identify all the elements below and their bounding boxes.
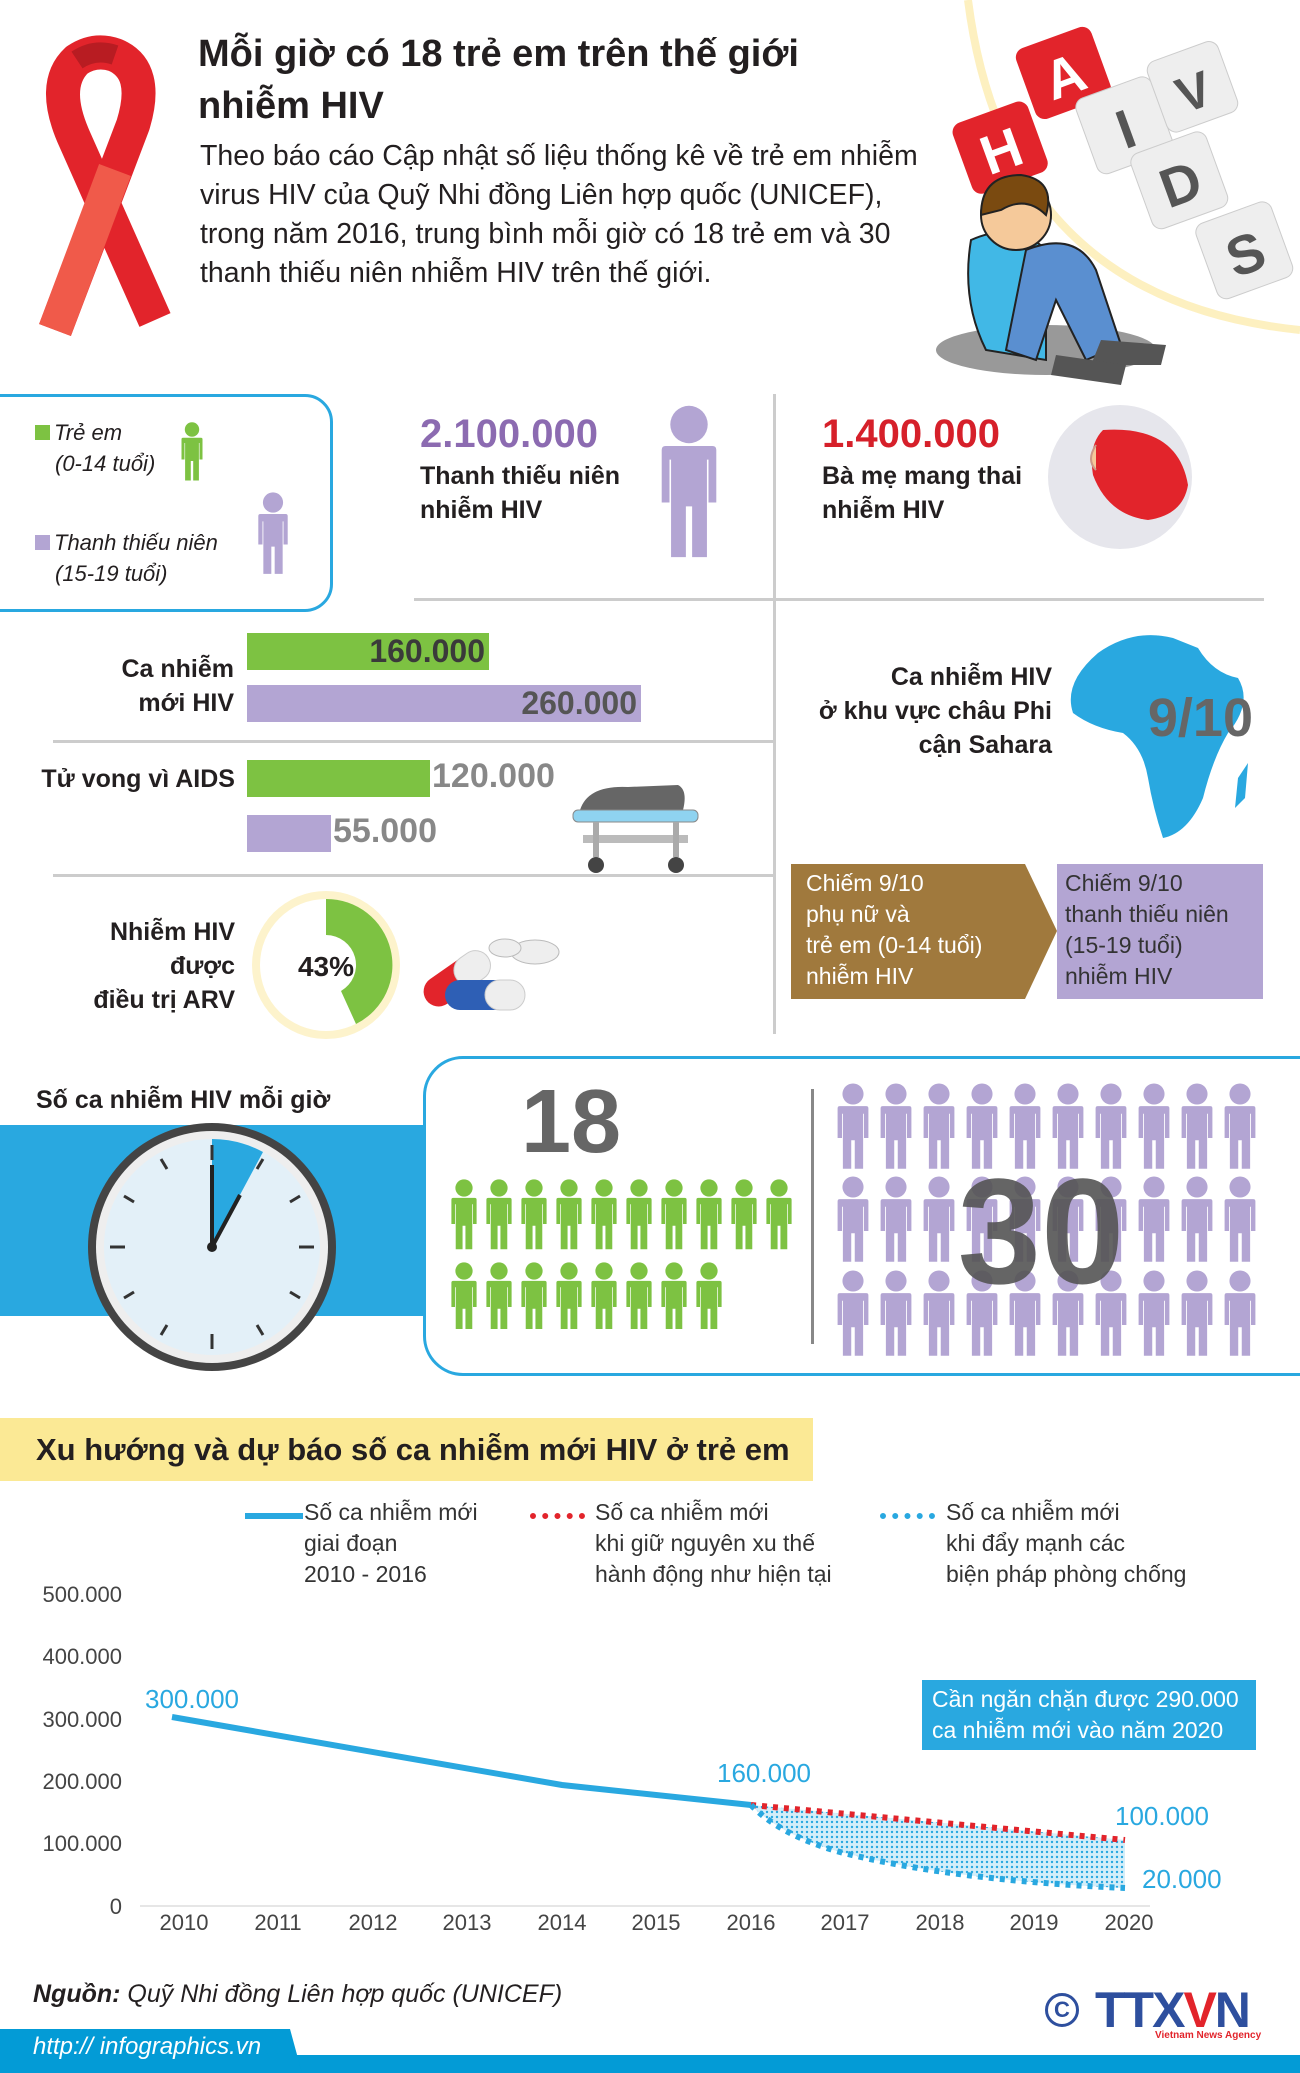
icon grid: 30 adolescents with number: 30 [958, 1147, 1124, 1315]
illustration: boy and AIDS dice: I [1108, 97, 1143, 161]
callout: adolescents 9/10: (15-19 tuổi) [1065, 932, 1183, 958]
chart legend: 2010 - 2016 [304, 1561, 427, 1587]
title [198, 32, 799, 127]
chart legend [245, 1499, 1186, 1587]
callout: adolescents 9/10: Chiếm 9/10 [1065, 870, 1183, 896]
line chart: new child infections: 2014 [538, 1910, 586, 1935]
line chart: new child infections: 2016 [727, 1910, 775, 1935]
stat: sub-Saharan Africa: Ca nhiễm HIV [891, 663, 1052, 691]
callout: 290.000 [922, 1680, 1256, 1750]
illustration: boy and AIDS dice: A [1035, 40, 1094, 112]
chart legend: biện pháp phòng chống [946, 1561, 1186, 1587]
icon grid: 30 adolescents with number [838, 1084, 1256, 1356]
line chart: new child infections: 300.000 [42, 1707, 122, 1732]
illustration: boy and AIDS dice: D [1151, 148, 1210, 220]
bar chart: new infections: 260.000 [521, 685, 637, 721]
bar chart: new infections [121, 633, 641, 722]
stat: pregnant women 1.4M: 1.400.000 [822, 412, 1000, 456]
source: Nguồn: Quỹ Nhi đồng Liên hợp quốc (UNICEF) [33, 1980, 562, 2008]
chart legend: Số ca nhiễm mới [946, 1499, 1120, 1525]
callout: women and children 9/10: nhiễm HIV [806, 963, 913, 989]
intro text: trong năm 2016, trung bình mỗi giờ có 18 trẻ em và 30 [200, 218, 890, 250]
icon: red ribbon [39, 35, 170, 336]
chart legend: khi đẩy mạnh các [946, 1530, 1125, 1556]
icon: Africa map [1070, 635, 1253, 838]
line chart: new child infections [42, 1582, 1256, 1935]
line chart: new child infections: 100.000 [42, 1831, 122, 1856]
heading: trend chart [0, 1418, 813, 1481]
logo: TTXVN: TTXVN [1095, 1982, 1249, 2038]
line chart: new child infections: 160.000 [717, 1758, 811, 1788]
panel: hourly infections [423, 1056, 1300, 1376]
line chart: new child infections: 2018 [916, 1910, 964, 1935]
line chart: new child infections: 2011 [254, 1910, 302, 1935]
logo: TTXVN: C [1054, 1997, 1070, 2022]
intro text: Theo báo cáo Cập nhật số liệu thống kê về trẻ em nhiễm [200, 140, 918, 172]
callout: women and children 9/10: Chiếm 9/10 [806, 870, 924, 896]
bar chart: AIDS deaths [41, 757, 555, 852]
stat: pregnant women 1.4M [822, 412, 1022, 524]
callout: adolescents 9/10 [1057, 864, 1263, 999]
line chart: new child infections: 2020 [1105, 1910, 1153, 1935]
line chart: new child infections: 2013 [443, 1910, 491, 1935]
stat: ARV treatment donut [93, 891, 560, 1039]
stat: adolescents 2.1M: 2.100.000 [420, 412, 598, 456]
bar chart: AIDS deaths: Tử vong vì AIDS [41, 765, 235, 793]
logo: TTXVN [1045, 1982, 1262, 2041]
chart legend: giai đoạn [304, 1530, 397, 1556]
icon: pregnant belly [1048, 405, 1192, 549]
callout: 290.000: Cần ngăn chặn được 290.000 [932, 1686, 1239, 1712]
line chart: new child infections: 2010 [160, 1910, 208, 1935]
legend: adolescents [35, 530, 218, 586]
line chart: new child infections: 300.000 [145, 1684, 239, 1714]
footer bar [0, 2055, 1300, 2073]
line chart: new child infections: 500.000 [42, 1582, 122, 1607]
icon: hospital bed [572, 785, 698, 873]
line chart: new child infections: 0 [110, 1894, 122, 1919]
heading: cases per hour: Số ca nhiễm HIV mỗi giờ [36, 1086, 330, 1114]
title: Mỗi giờ có 18 trẻ em trên thế giới [198, 33, 799, 75]
stat: ARV treatment donut: Nhiễm HIV [110, 918, 235, 946]
stat: pregnant women 1.4M: nhiễm HIV [822, 496, 944, 524]
illustration: boy and AIDS dice: S [1218, 219, 1273, 289]
intro text: thanh thiếu niên nhiễm HIV trên thế giới. [200, 257, 711, 289]
icon: child [182, 422, 202, 480]
line chart: new child infections: 2012 [349, 1910, 397, 1935]
legend: children [35, 420, 155, 476]
chart legend: Số ca nhiễm mới [595, 1499, 769, 1525]
stat: sub-Saharan Africa: ở khu vực châu Phi [819, 697, 1052, 725]
footer url: http:// infographics.vn [33, 2033, 261, 2060]
chart legend: Số ca nhiễm mới [304, 1499, 478, 1525]
chart legend: hành động như hiện tại [595, 1561, 832, 1587]
icon: clock [88, 1123, 336, 1371]
callout: women and children 9/10: trẻ em (0-14 tuổi) [806, 932, 982, 958]
legend: children: (0-14 tuổi) [55, 451, 155, 476]
bar chart: AIDS deaths: 55.000 [333, 812, 437, 850]
heading: trend chart: Xu hướng và dự báo số ca nhiễm mới HIV ở trẻ em [36, 1432, 790, 1467]
intro text [200, 140, 918, 289]
icon: adolescent [258, 492, 288, 574]
illustration: boy and AIDS dice [936, 0, 1300, 385]
logo: TTXVN: Vietnam News Agency [1155, 2030, 1261, 2041]
bar chart: AIDS deaths: 120.000 [432, 757, 555, 795]
bar chart: new infections: mới HIV [138, 689, 234, 717]
legend: adolescents: Thanh thiếu niên [54, 530, 218, 555]
panel: legend [0, 394, 333, 612]
icon grid: 18 children [451, 1179, 792, 1329]
stat: sub-Saharan Africa: cận Sahara [919, 731, 1052, 759]
line chart: new child infections: 2019 [1010, 1910, 1058, 1935]
callout: women and children 9/10 [791, 864, 1025, 999]
icon: pills [424, 938, 560, 1010]
callout: adolescents 9/10: thanh thiếu niên [1065, 901, 1229, 927]
stat: adolescents 2.1M: Thanh thiếu niên [420, 462, 620, 490]
bar chart: new infections: Ca nhiễm [121, 655, 234, 683]
callout: adolescents 9/10: nhiễm HIV [1065, 963, 1172, 989]
stat: ARV treatment donut: điều trị ARV [93, 986, 235, 1014]
line chart: new child infections: 100.000 [1115, 1801, 1209, 1831]
intro text: virus HIV của Quỹ Nhi đồng Liên hợp quốc (UNICEF), [200, 179, 882, 211]
stat: adolescents 2.1M [420, 412, 620, 524]
bar chart: new infections: 160.000 [369, 633, 485, 669]
chart legend: khi giữ nguyên xu thế [595, 1530, 815, 1556]
line chart: new child infections: 400.000 [42, 1644, 122, 1669]
callout: 290.000: ca nhiễm mới vào năm 2020 [932, 1717, 1223, 1743]
stat: sub-Saharan Africa [819, 662, 1052, 759]
legend: adolescents: (15-19 tuổi) [55, 561, 168, 586]
callout: women and children 9/10: phụ nữ và [806, 901, 910, 927]
icon: Africa map: 9/10 [1148, 688, 1253, 748]
stat: ARV treatment donut: 43% [298, 951, 354, 982]
stat: pregnant women 1.4M: Bà mẹ mang thai [822, 462, 1022, 490]
line chart: new child infections: 2015 [632, 1910, 680, 1935]
line chart: new child infections: 20.000 [1142, 1864, 1222, 1894]
stat: ARV treatment donut: được [170, 952, 235, 980]
illustration: boy and AIDS dice: H [972, 115, 1031, 187]
line chart: new child infections: 2017 [821, 1910, 869, 1935]
icon: adolescent big [662, 406, 716, 558]
stat: adolescents 2.1M: nhiễm HIV [420, 496, 542, 524]
line chart: new child infections: 200.000 [42, 1769, 122, 1794]
title: nhiễm HIV [198, 85, 384, 127]
legend: children: Trẻ em [54, 420, 122, 445]
number: 18 children: 18 [521, 1072, 621, 1172]
illustration: boy and AIDS dice: V [1169, 60, 1220, 124]
